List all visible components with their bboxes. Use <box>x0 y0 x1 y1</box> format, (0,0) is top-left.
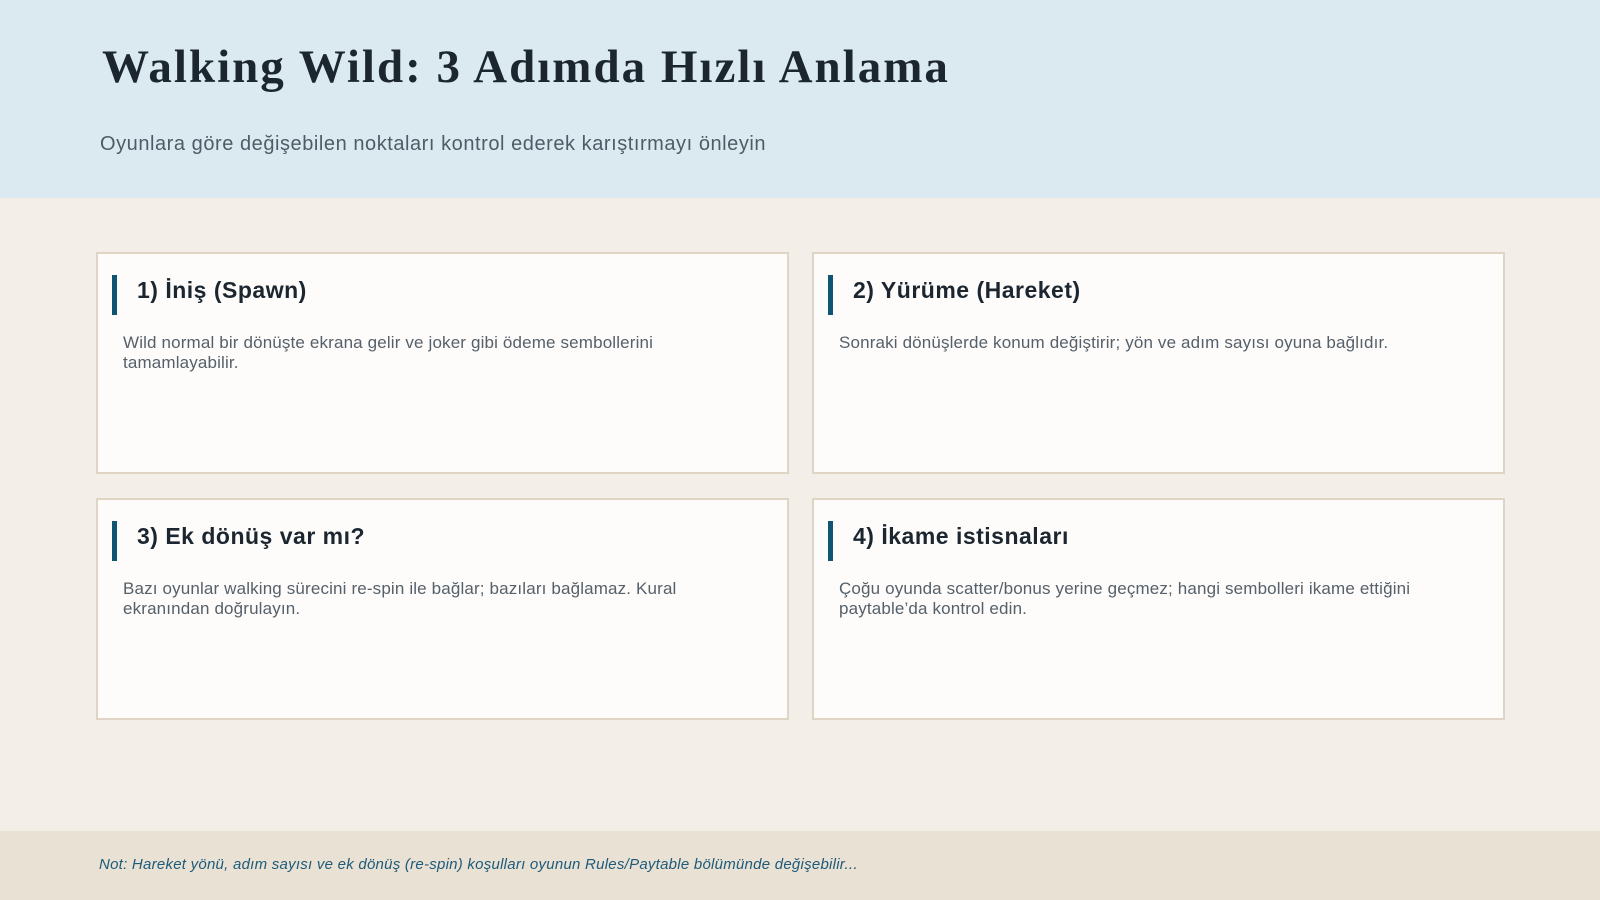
heading: step 2: 2) Yürüme (Hareket) <box>853 277 1081 303</box>
panel: step 2 <box>812 252 1505 474</box>
panel: step 1 <box>96 252 789 474</box>
panel: step 3 <box>96 498 789 720</box>
footer note <box>0 831 1600 900</box>
header band <box>0 0 1600 198</box>
footer note: Not: Hareket yönü, adım sayısı ve ek dönüş (re-spin) koşulları oyunun Rules/Paytable bölümünde değişebilir... <box>99 856 858 873</box>
heading: step 4: 4) İkame istisnaları <box>853 523 1069 549</box>
text: step 4: Çoğu oyunda scatter/bonus yerine geçmez; hangi sembolleri ikame ettiğini paytable’da kontrol edin. <box>839 579 1410 618</box>
heading: step 3: 3) Ek dönüş var mı? <box>137 523 365 549</box>
heading: step 1: 1) İniş (Spawn) <box>137 277 307 303</box>
text: step 1: Wild normal bir dönüşte ekrana gelir ve joker gibi ödeme sembollerini tamamlayabilir. <box>123 333 653 372</box>
text: step 2: Sonraki dönüşlerde konum değiştirir; yön ve adım sayısı oyuna bağlıdır. <box>839 333 1388 352</box>
title: Walking Wild: 3 Adımda Hızlı Anlama <box>102 41 950 93</box>
text: step 3: Bazı oyunlar walking sürecini re-spin ile bağlar; bazıları bağlamaz. Kural ekranından doğrulayın. <box>123 579 676 618</box>
subtitle: Oyunlara göre değişebilen noktaları kontrol ederek karıştırmayı önleyin <box>100 133 766 155</box>
panel: step 4 <box>812 498 1505 720</box>
